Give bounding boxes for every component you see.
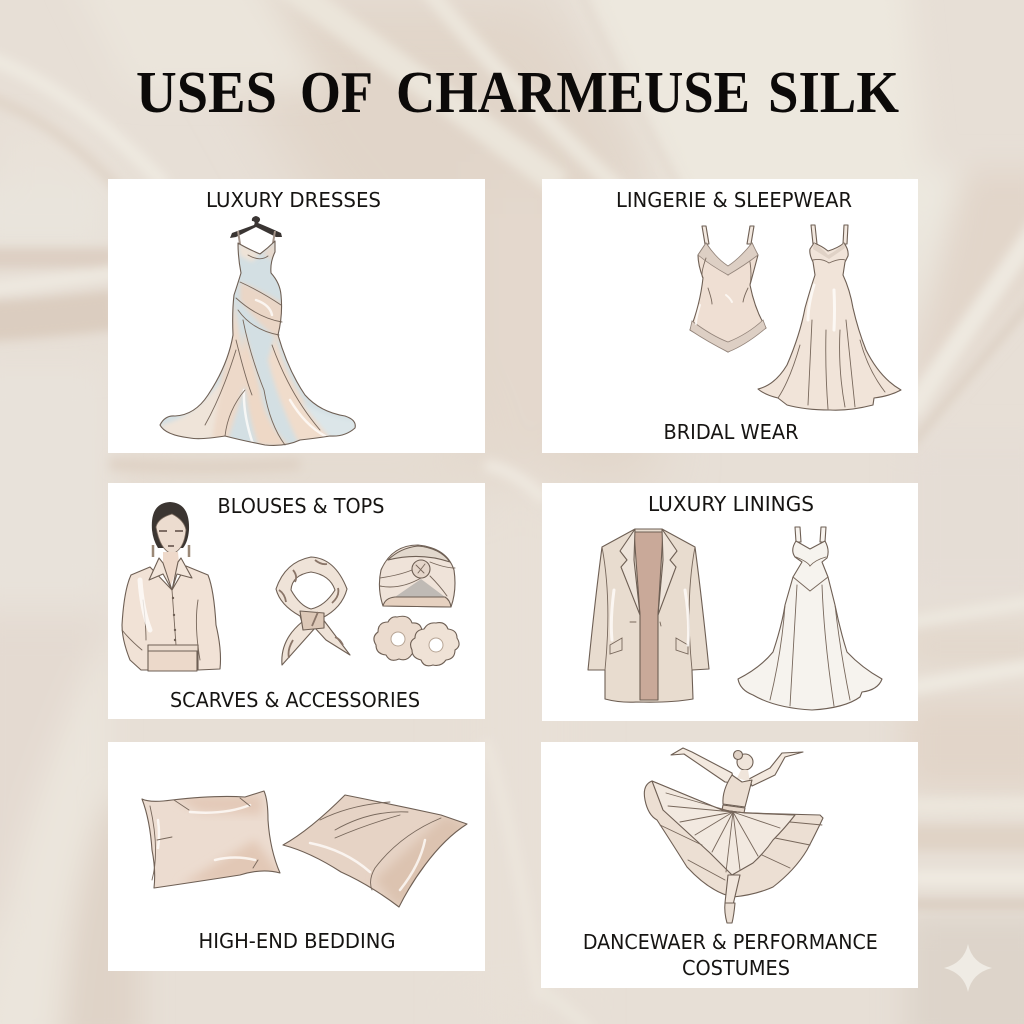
label: dancewear and performance costumes: COSTUMES — [682, 956, 790, 980]
icon: silk neck scarf — [276, 557, 350, 665]
title: USES — [136, 60, 277, 125]
icon: scrunchies — [374, 616, 459, 666]
icon: dress on hanger — [160, 216, 356, 446]
title: OF — [300, 60, 373, 125]
panel: dancewear and performance costumes — [541, 742, 918, 988]
icon: sparkle — [944, 944, 992, 992]
icon: lined blazer — [588, 529, 709, 702]
label: dancewear and performance costumes: DANCEWAER & PERFORMANCE — [583, 930, 878, 954]
panel: luxury linings — [542, 483, 918, 721]
title: SILK — [768, 60, 899, 125]
panel: luxury dresses — [108, 179, 485, 455]
icon: woman in silk blouse — [122, 502, 220, 671]
heading: blouses and tops: BLOUSES & TOPS — [218, 494, 384, 518]
heading: luxury dresses: LUXURY DRESSES — [206, 188, 381, 212]
icon: lace camisole — [690, 226, 766, 352]
heading: lingerie and sleepwear: LINGERIE & SLEEPWEAR — [616, 188, 852, 212]
icon: angled pillow — [282, 794, 468, 908]
panel: lingerie, sleepwear and bridal wear — [542, 179, 918, 453]
icon: white gown — [738, 527, 882, 710]
title: CHARMEUSE — [396, 60, 750, 125]
icon: flat pillow — [141, 790, 280, 888]
icon: bridal gown — [758, 225, 901, 410]
icon: ballerina — [644, 748, 823, 923]
label: high-end bedding: HIGH-END BEDDING — [198, 929, 396, 953]
label: scarves and accessories: SCARVES & ACCESSORIES — [170, 688, 420, 712]
heading: luxury linings: LUXURY LININGS — [648, 492, 814, 516]
icon: silk turban — [379, 545, 455, 607]
panel: blouses, scarves and accessories — [108, 483, 485, 719]
panel: high-end bedding — [108, 742, 485, 971]
label: bridal wear: BRIDAL WEAR — [664, 420, 799, 444]
